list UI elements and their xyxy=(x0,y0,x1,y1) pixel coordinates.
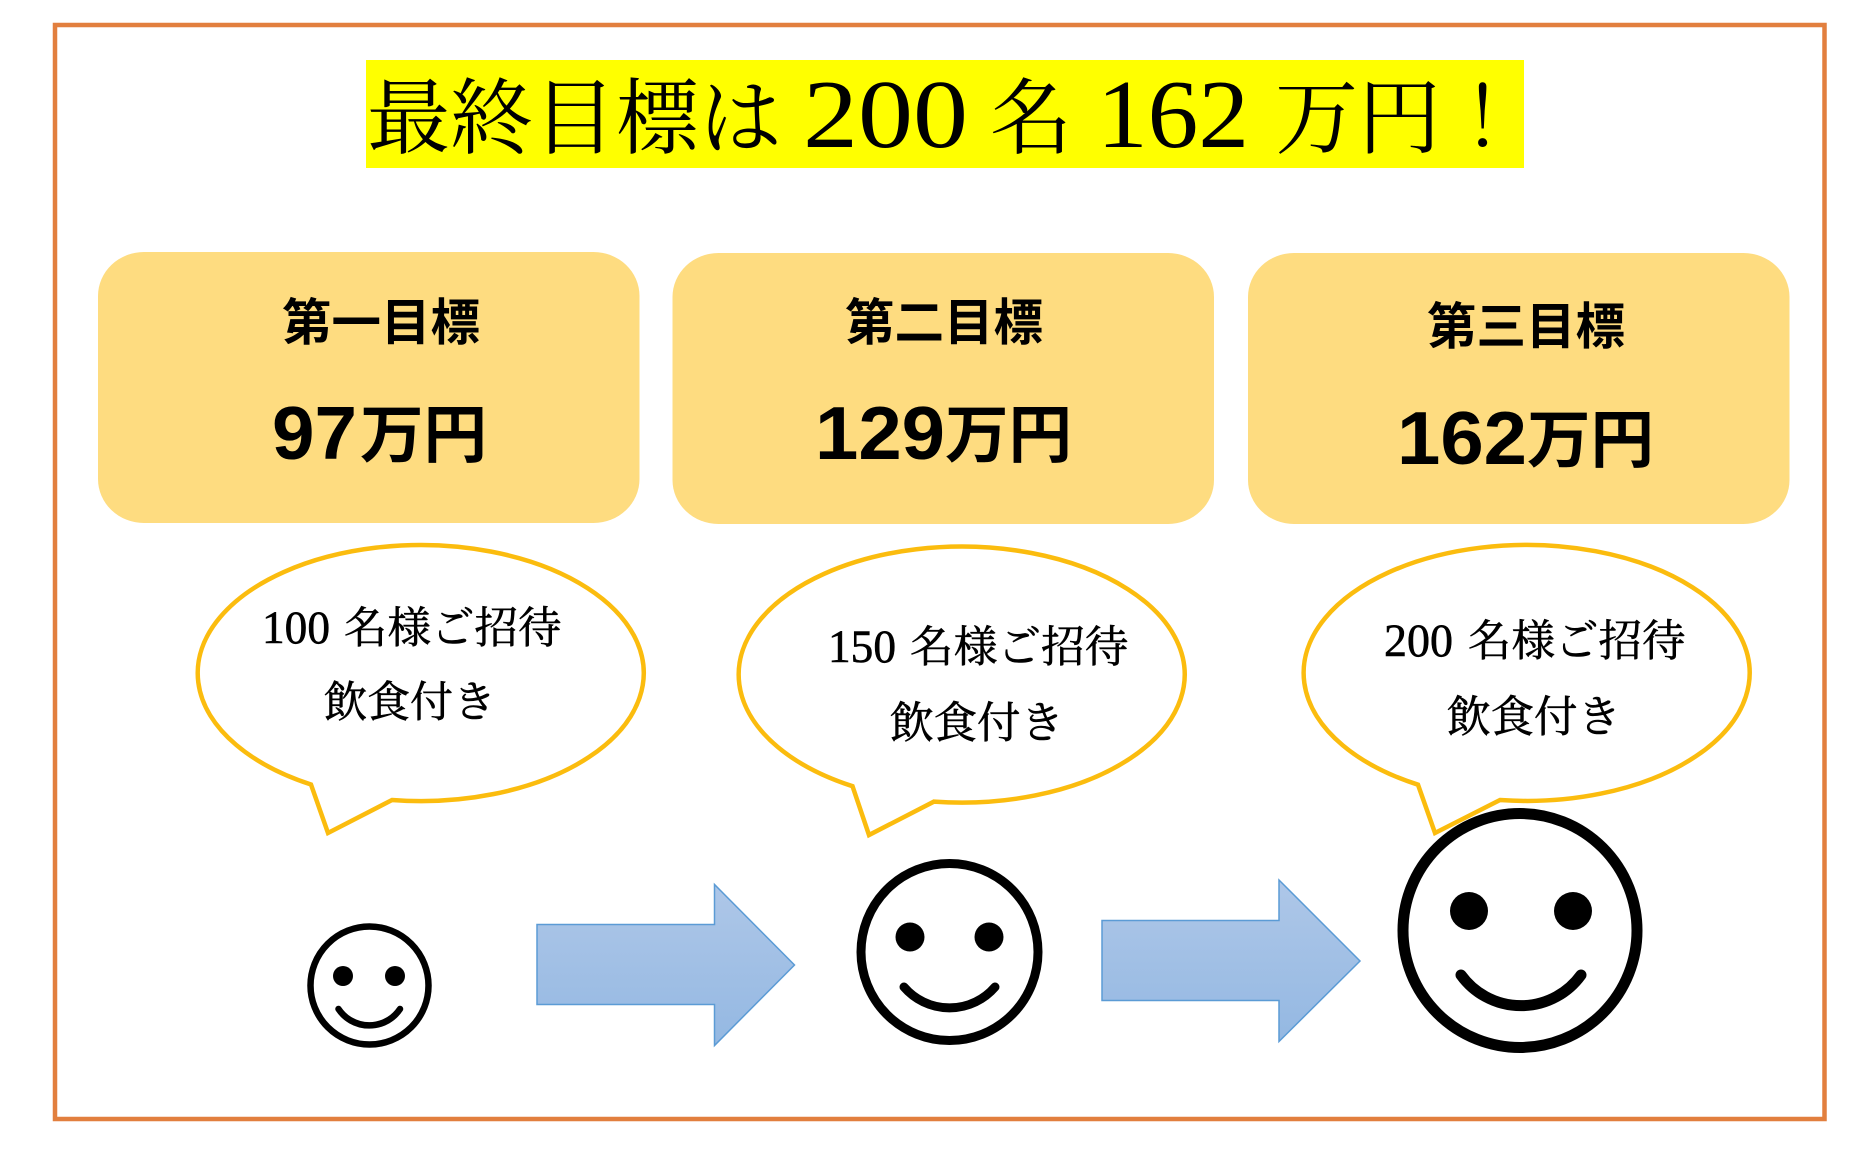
panel: goal 3: 万円 xyxy=(1527,390,1654,481)
panel: goal 2: 129 xyxy=(815,391,945,475)
speech bubble 2: 名様ご招待 xyxy=(910,613,1128,675)
speech bubble 3: 200 xyxy=(1384,615,1453,667)
speech bubble 2 xyxy=(739,547,1185,835)
speech bubble 1: 名様ご招待 xyxy=(344,594,562,656)
panel: goal 1: 97 xyxy=(272,391,357,475)
panel: goal 1: 万円 xyxy=(360,385,487,476)
arrow: first xyxy=(537,884,794,1046)
panel: goal 1 xyxy=(98,252,640,523)
icon: large smiley xyxy=(1403,814,1637,1048)
speech bubble 2: 飲食付き xyxy=(890,689,1064,751)
icon: medium smiley xyxy=(861,864,1038,1040)
arrow: second xyxy=(1102,880,1360,1042)
speech bubble 1: 100 xyxy=(262,602,330,654)
panel: goal 1: 第一目標 xyxy=(282,283,480,355)
speech bubble 3: 名様ご招待 xyxy=(1468,607,1686,669)
panel: goal 3: 第三目標 xyxy=(1427,287,1625,359)
panel: goal 2: 第二目標 xyxy=(845,283,1043,355)
speech bubble 3 xyxy=(1304,545,1750,833)
panel: goal 2: 万円 xyxy=(945,385,1072,476)
icon: small smiley xyxy=(310,926,428,1044)
speech bubble 3: 飲食付き xyxy=(1447,683,1621,745)
title: 162 xyxy=(1097,61,1249,169)
speech bubble 2: 150 xyxy=(828,621,896,673)
title: 最終目標は xyxy=(367,51,782,171)
panel: goal 2 xyxy=(672,253,1214,524)
speech bubble 1 xyxy=(198,545,644,833)
panel: goal 3 xyxy=(1248,253,1790,524)
title: 名 xyxy=(990,51,1073,171)
title: 200 xyxy=(803,61,968,169)
title xyxy=(366,51,1545,171)
panel: goal 3: 162 xyxy=(1397,396,1527,480)
speech bubble 1: 飲食付き xyxy=(324,669,496,730)
title: 万円 xyxy=(1275,51,1441,171)
title: ！ xyxy=(1462,51,1545,171)
